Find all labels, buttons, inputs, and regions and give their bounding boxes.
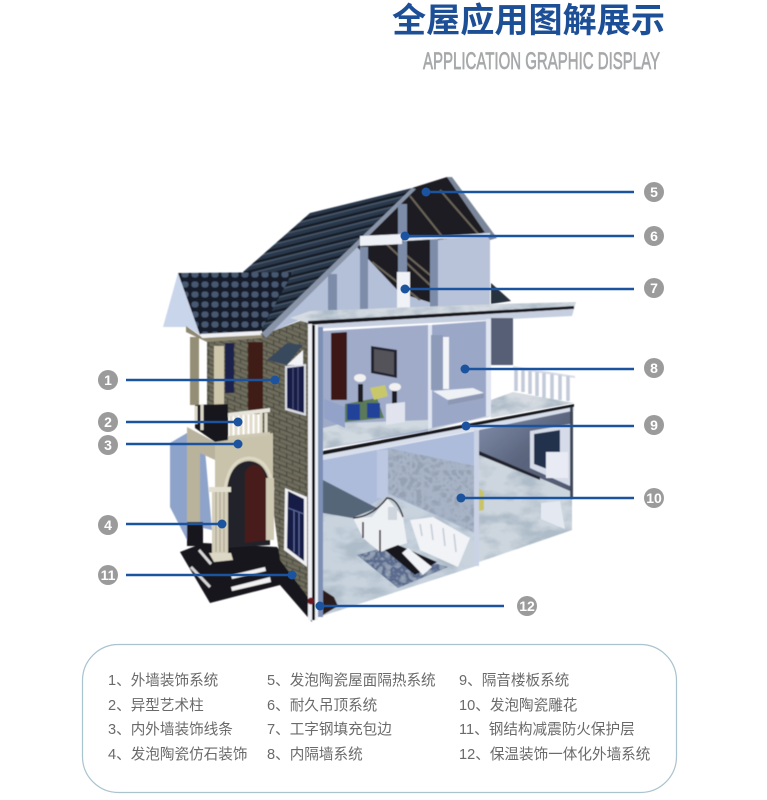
upper room inner partition bbox=[428, 325, 432, 431]
attic floor marble bbox=[290, 302, 576, 323]
right section edge bbox=[570, 407, 573, 499]
upper column strip bbox=[214, 346, 224, 406]
legend column 3: 12、保温装饰一体化外墙系统 bbox=[459, 746, 650, 763]
legend column 1: 4、发泡陶瓷仿石装饰 bbox=[108, 746, 247, 763]
plinth and front steps bbox=[180, 543, 312, 622]
callout 12 bbox=[316, 596, 537, 616]
balcony dark opening bbox=[195, 404, 228, 442]
sofa left bbox=[353, 498, 407, 552]
porch lintel bbox=[186, 326, 262, 342]
ground shadow bbox=[170, 433, 212, 540]
front column bbox=[209, 487, 233, 562]
callout 4: 4 bbox=[104, 517, 112, 533]
callout 9: 9 bbox=[650, 417, 658, 433]
right room window bbox=[530, 424, 570, 486]
legend column 2 bbox=[267, 672, 436, 763]
right eave fragment bbox=[491, 283, 511, 304]
arch surround bbox=[225, 458, 273, 490]
callout 6 bbox=[400, 226, 664, 246]
nightstand bbox=[386, 402, 405, 425]
right partition bbox=[486, 319, 491, 417]
callout 2: 2 bbox=[104, 414, 112, 430]
callout 10 bbox=[456, 488, 664, 508]
main roof verge bbox=[262, 188, 416, 338]
porch roof bbox=[178, 272, 293, 335]
callout 4 bbox=[98, 515, 226, 535]
right beam bbox=[404, 233, 490, 241]
callout 5 bbox=[422, 182, 664, 202]
porch front block bbox=[215, 433, 273, 505]
callout 11: 11 bbox=[101, 567, 116, 583]
bathroom vanity bbox=[433, 388, 484, 405]
yellow chair bbox=[479, 488, 484, 511]
sofa right bbox=[410, 517, 470, 567]
right room skirting bbox=[479, 451, 540, 480]
rafters bbox=[372, 190, 480, 300]
right pilaster bbox=[266, 478, 274, 540]
legend column 2: 7、工字钢填充包边 bbox=[267, 721, 392, 738]
callout 2 bbox=[98, 412, 242, 432]
dark left floor strip bbox=[323, 480, 377, 518]
balustrade bbox=[196, 405, 270, 440]
legend column 2: 6、耐久吊顶系统 bbox=[267, 697, 377, 714]
callout 5: 5 bbox=[650, 184, 658, 200]
white pillar bbox=[397, 272, 410, 313]
upper slab bbox=[308, 306, 574, 329]
callout 8 bbox=[460, 358, 664, 378]
upper side window bbox=[285, 364, 306, 416]
attic right wall bbox=[438, 232, 490, 312]
callout 6: 6 bbox=[650, 228, 658, 244]
legend column 3: 11、钢结构减震防火保护层 bbox=[459, 721, 635, 738]
small upper window bbox=[225, 343, 234, 393]
carpet bbox=[357, 548, 448, 588]
left wall pier bbox=[377, 450, 388, 498]
callout 7 bbox=[400, 278, 664, 298]
section wall edge stripes bbox=[308, 324, 323, 620]
right room back wall bbox=[479, 411, 572, 492]
porch left entablature bbox=[187, 427, 215, 460]
lower front cupboard bbox=[323, 590, 338, 615]
callout 10: 10 bbox=[646, 490, 662, 506]
right roof edge bbox=[447, 177, 497, 240]
bathroom window bbox=[431, 335, 449, 390]
lower room floor base bbox=[322, 494, 476, 616]
upper door bbox=[248, 342, 263, 414]
upper floor marble left bbox=[323, 416, 490, 449]
legend column 3 bbox=[459, 671, 650, 763]
callout 7: 7 bbox=[650, 280, 658, 296]
callout 11 bbox=[98, 565, 296, 585]
bathroom wall bbox=[432, 321, 487, 428]
lower side window bbox=[284, 488, 307, 567]
callout 9 bbox=[462, 415, 664, 435]
attic posts bbox=[328, 204, 438, 314]
upper dark panel bbox=[491, 318, 513, 365]
wall picture bbox=[371, 346, 397, 378]
stone front upper wall bbox=[207, 333, 270, 415]
right room floor bbox=[479, 452, 572, 562]
legend column 1: 1、外墙装饰系统 bbox=[108, 672, 218, 689]
attic back wall bbox=[263, 246, 438, 335]
legend column 1: 2、异型艺术柱 bbox=[108, 697, 204, 714]
left arch column bbox=[187, 446, 200, 524]
main roof bbox=[243, 188, 412, 335]
feature wall carving bbox=[388, 448, 475, 533]
house cutaway illustration bbox=[163, 177, 576, 622]
bedside lamps bbox=[354, 374, 401, 404]
callout 1: 1 bbox=[104, 372, 112, 388]
porch gable bbox=[163, 273, 200, 335]
callout 3: 3 bbox=[104, 437, 112, 453]
red corner mark bbox=[308, 598, 314, 604]
balcony balustrade bbox=[513, 366, 575, 401]
stone side wall bbox=[262, 318, 310, 600]
porch roof edge bbox=[200, 331, 261, 338]
balcony marble floor bbox=[491, 392, 574, 418]
legend column 3: 10、发泡陶瓷雕花 bbox=[459, 697, 577, 714]
left arch column base bbox=[187, 522, 203, 546]
callout 3 bbox=[98, 435, 242, 455]
attic dark roof underside bbox=[357, 177, 490, 305]
legend column 1 bbox=[108, 672, 247, 763]
legend panel bbox=[82, 644, 676, 792]
callout 8: 8 bbox=[650, 360, 658, 376]
coffee table bbox=[385, 545, 437, 575]
steel beam white cladding bbox=[360, 234, 402, 246]
callout 12: 12 bbox=[519, 598, 535, 614]
upper left room wall bbox=[323, 325, 428, 449]
callout 1 bbox=[98, 370, 280, 390]
legend column 2: 8、内隔墙系统 bbox=[267, 746, 363, 763]
divider wall bbox=[474, 430, 479, 566]
kitchen counter bbox=[541, 501, 565, 529]
front door bbox=[245, 465, 267, 543]
mid slab bbox=[323, 404, 574, 460]
legend column 1: 3、内外墙装饰线条 bbox=[108, 721, 233, 738]
left upper column bbox=[190, 337, 199, 405]
legend column 2: 5、发泡陶瓷屋面隔热系统 bbox=[267, 672, 436, 689]
arch opening bbox=[227, 461, 270, 548]
title: 全屋应用图解展示 bbox=[392, 2, 665, 40]
dormer awning bbox=[267, 343, 303, 365]
bed bbox=[324, 385, 388, 428]
upper room side door bbox=[331, 332, 347, 400]
legend column 3: 9、隔音楼板系统 bbox=[459, 671, 569, 689]
lower room back wall bbox=[323, 431, 475, 535]
